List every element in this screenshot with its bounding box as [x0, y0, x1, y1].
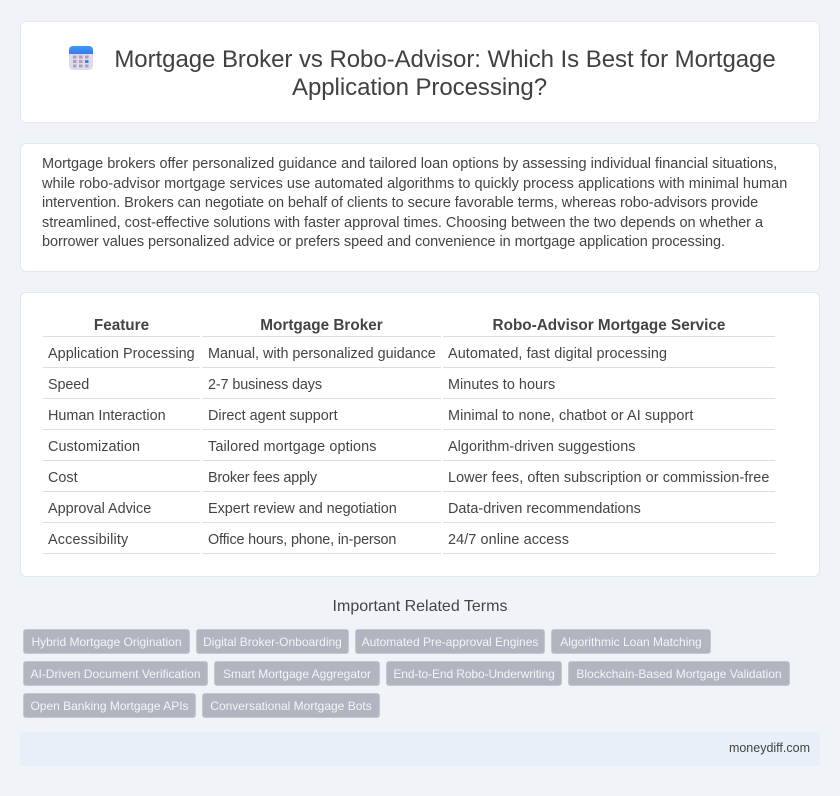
- intro text: streamlined, cost-effective solutions with faster approval times. Choosing between the two depends on whether a: [42, 214, 763, 230]
- comparison table: Expert review and negotiation: [208, 501, 397, 517]
- comparison table: Human Interaction: [48, 408, 166, 424]
- related terms tags: Open Banking Mortgage APIs: [30, 699, 189, 713]
- related terms heading: Important Related Terms: [333, 598, 507, 615]
- intro text: borrower values personalized advice or prefers speed and convenience in mortgage application processing.: [42, 234, 725, 250]
- comparison table: Broker fees apply: [208, 470, 317, 486]
- related terms tags: [23, 629, 790, 718]
- header card: [20, 21, 820, 123]
- comparison table: Customization: [48, 439, 140, 455]
- related terms tags: Algorithmic Loan Matching: [560, 635, 702, 649]
- comparison table: Manual, with personalized guidance: [208, 346, 436, 362]
- footer bar: [20, 732, 820, 766]
- comparison table: Automated, fast digital processing: [448, 346, 667, 362]
- comparison table: Application Processing: [48, 346, 195, 362]
- comparison table: Accessibility: [48, 532, 128, 548]
- comparison table: Cost: [48, 470, 78, 486]
- intro text: Mortgage brokers offer personalized guidance and tailored loan options by assessing individual financial situations,: [42, 156, 777, 172]
- comparison table: 24/7 online access: [448, 532, 569, 548]
- intro text: intervention. Brokers can negotiate on behalf of clients to secure favorable terms, whereas robo-advisors provide: [42, 195, 758, 211]
- comparison table: Approval Advice: [48, 501, 151, 517]
- comparison table: Minutes to hours: [448, 377, 555, 393]
- comparison table: Speed: [48, 377, 89, 393]
- intro text: [42, 156, 787, 250]
- comparison table: Algorithm-driven suggestions: [448, 439, 636, 455]
- comparison table: Feature: [94, 317, 149, 334]
- comparison table: Office hours, phone, in-person: [208, 532, 396, 548]
- comparison table: Lower fees, often subscription or commission-free: [448, 470, 769, 486]
- comparison table: Data-driven recommendations: [448, 501, 641, 517]
- comparison table: [43, 317, 775, 554]
- comparison table: 2-7 business days: [208, 377, 322, 393]
- title: [114, 46, 776, 101]
- related terms tags: Conversational Mortgage Bots: [210, 699, 372, 713]
- icon: calendar: [69, 46, 93, 70]
- related terms tags: Blockchain-Based Mortgage Validation: [576, 667, 782, 681]
- title: Application Processing?: [292, 74, 547, 101]
- related terms tags: End-to-End Robo-Underwriting: [393, 667, 555, 681]
- intro panel: [20, 143, 820, 272]
- related terms tags: Smart Mortgage Aggregator: [223, 667, 371, 681]
- footer source: moneydiff.com: [729, 741, 810, 755]
- comparison table: Direct agent support: [208, 408, 338, 424]
- related terms tags: AI-Driven Document Verification: [30, 667, 201, 681]
- comparison table: Tailored mortgage options: [208, 439, 377, 455]
- related terms tags: Hybrid Mortgage Origination: [31, 635, 182, 649]
- comparison table panel: [20, 292, 820, 577]
- related terms tags: Automated Pre-approval Engines: [362, 635, 538, 649]
- comparison table: Minimal to none, chatbot or AI support: [448, 408, 693, 424]
- comparison table: Robo-Advisor Mortgage Service: [493, 317, 725, 334]
- title: Mortgage Broker vs Robo-Advisor: Which Is Best for Mortgage: [114, 46, 776, 73]
- related terms tags: Digital Broker-Onboarding: [203, 635, 342, 649]
- intro text: while robo-advisor mortgage services use automated algorithms to quickly process applications with minimal human: [42, 176, 787, 192]
- comparison table: Mortgage Broker: [260, 317, 383, 334]
